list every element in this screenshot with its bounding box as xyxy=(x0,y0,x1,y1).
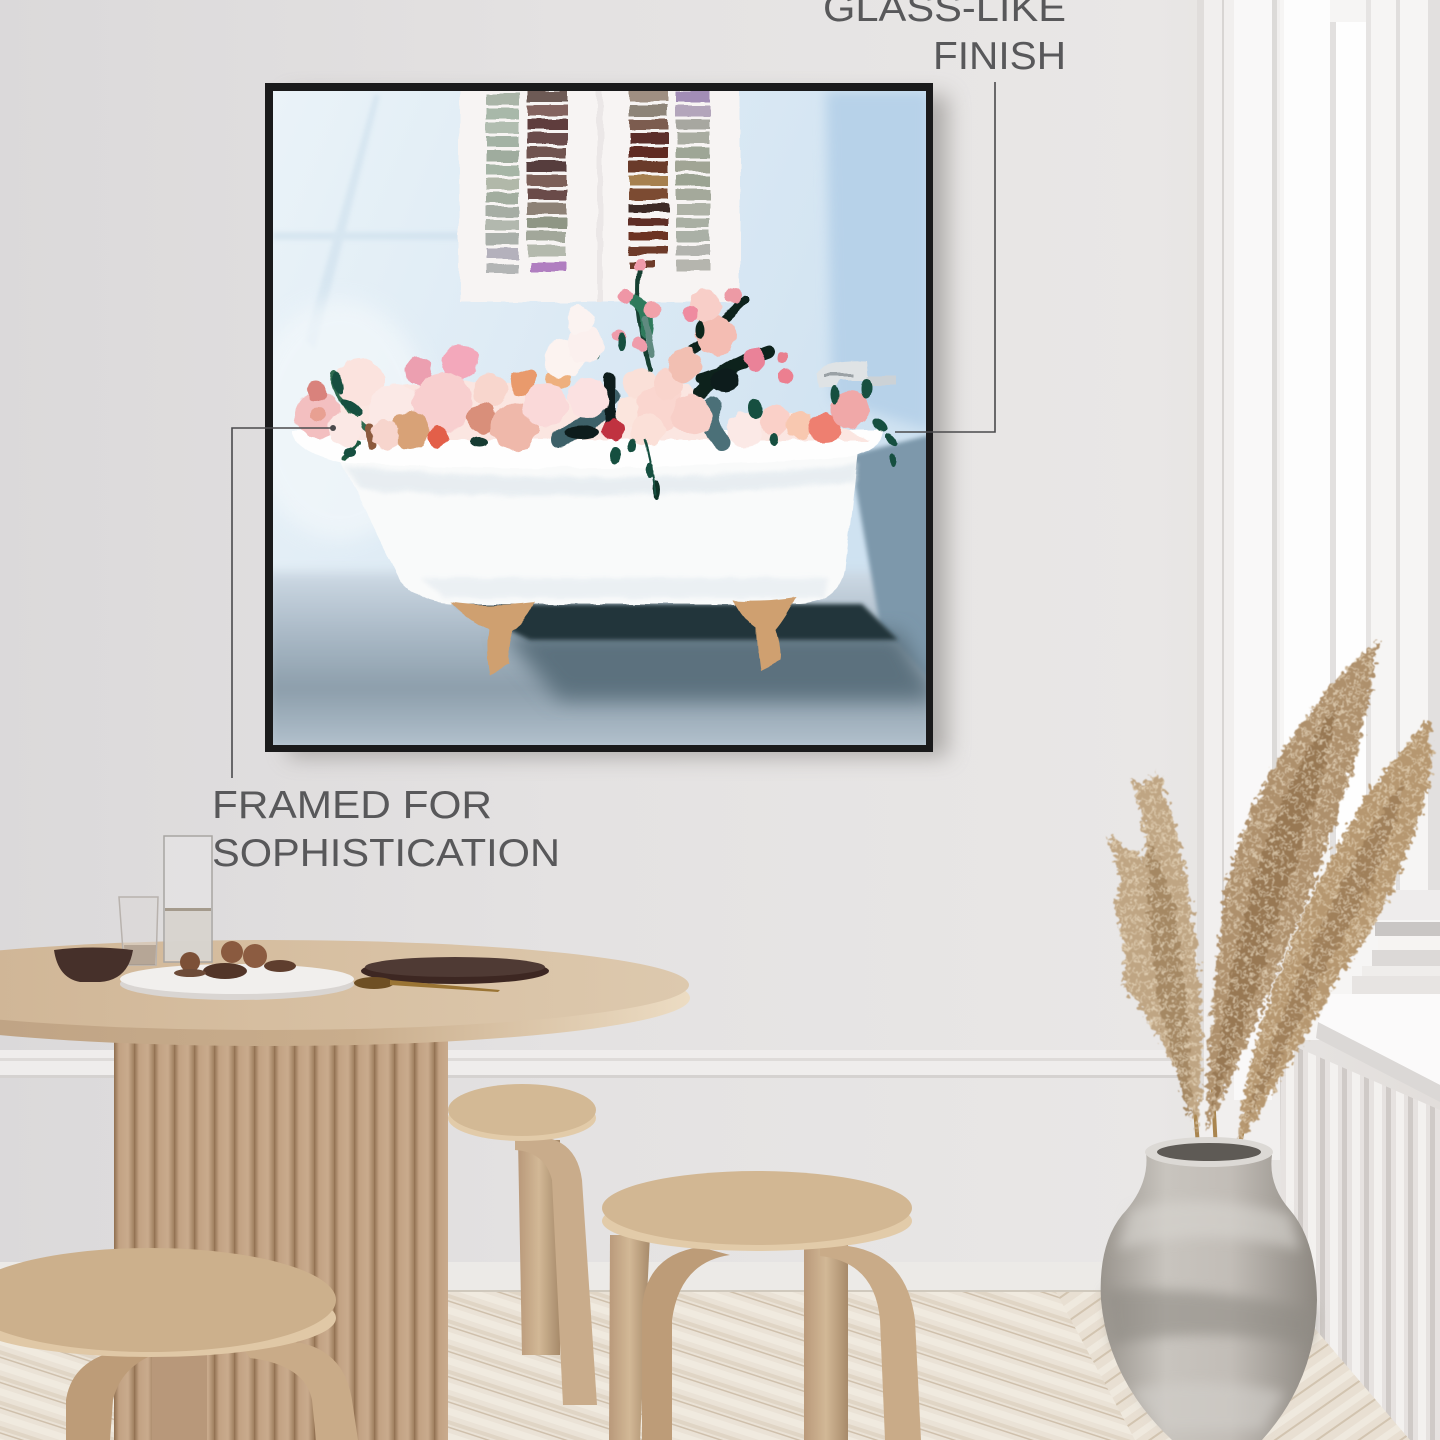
baseboard xyxy=(0,1262,1290,1292)
callout label: framed for sophistication: FRAMED FOR xyxy=(212,784,492,827)
marble board with nuts xyxy=(120,941,354,1000)
shadow under tub xyxy=(455,604,935,700)
fluted table pedestal xyxy=(114,1035,448,1440)
window sill xyxy=(1318,994,1440,1085)
framed artwork xyxy=(250,83,935,752)
blue wall corner xyxy=(826,91,930,430)
gold spoons xyxy=(354,977,500,992)
centre plume xyxy=(1208,640,1378,1130)
painted floor xyxy=(265,572,935,752)
chrome faucet xyxy=(816,362,896,388)
front stool xyxy=(602,1171,921,1440)
callout label: framed for sophistication: SOPHISTICATION xyxy=(212,832,560,875)
dark wood bowl xyxy=(54,948,133,982)
near-left stool xyxy=(0,1248,358,1440)
shadow wall behind tub xyxy=(854,434,926,675)
callout leader: framed xyxy=(232,425,336,778)
black frame xyxy=(265,83,933,752)
painting canvas xyxy=(250,90,935,752)
dark wood plate xyxy=(361,957,549,984)
right plume xyxy=(1238,720,1432,1145)
pale bloom mass xyxy=(330,379,870,440)
pale glow on wall xyxy=(273,300,417,535)
left plume xyxy=(1106,770,1202,1130)
callout label: framed for sophistication xyxy=(212,784,560,875)
ceramic vase xyxy=(1101,1137,1317,1440)
pampas grass plumes xyxy=(1106,640,1432,1152)
glass carafe and tumbler xyxy=(119,836,212,965)
light beams on wall xyxy=(274,96,458,308)
round table top xyxy=(0,940,690,1046)
callout label: glass-like finish xyxy=(823,0,1066,78)
callout leader: glass-like finish xyxy=(895,82,995,432)
foliage behind blooms xyxy=(332,262,768,458)
white bathtub xyxy=(291,430,884,604)
callout label: glass-like finish: FINISH xyxy=(933,35,1066,78)
right shutter slats xyxy=(629,91,710,271)
artwork drop shadow xyxy=(288,95,948,757)
chair rail moulding xyxy=(0,1050,1200,1078)
rose blooms xyxy=(295,259,869,450)
window frame and mouldings xyxy=(1197,0,1440,1160)
plume stems xyxy=(1193,1075,1252,1152)
left shutter slats xyxy=(486,91,567,273)
window shutters xyxy=(459,90,740,302)
stacked books on sill xyxy=(1352,922,1440,994)
radiator xyxy=(1280,1040,1440,1440)
gold claw feet xyxy=(450,597,797,676)
floor herringbone planks xyxy=(0,1290,1410,1440)
foreground leaves and vines xyxy=(329,321,900,499)
stool behind table xyxy=(448,1084,597,1405)
